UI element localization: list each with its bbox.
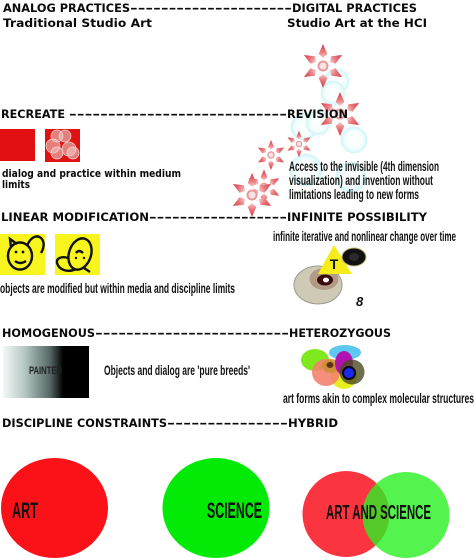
heading: homogenous to heterozygous: HOMOGENOUS xyxy=(2,326,95,340)
venn diagram: art and science xyxy=(302,471,450,558)
bubbles xyxy=(290,69,367,192)
icon: eye and triangle: 8 xyxy=(356,294,364,309)
panel: digital bubbles and stars xyxy=(231,44,367,217)
heading: discipline constraints to hybrid xyxy=(2,416,338,430)
heading: linear modification to infinite possibility: ------------------ xyxy=(149,210,287,224)
circle: art: ART xyxy=(12,498,38,523)
heading: linear modification to infinite possibility xyxy=(1,210,427,224)
heading: recreate to revision xyxy=(1,107,348,121)
heading: discipline constraints to hybrid: --------------- xyxy=(167,416,288,430)
icon: eye and triangle: T xyxy=(330,256,339,272)
heading: homogenous to heterozygous xyxy=(2,326,391,340)
icon: molecular structure xyxy=(301,345,364,389)
text: objects are modified: objects are modified but within media and discipline limits xyxy=(0,281,235,296)
text: dialog and practice: limits xyxy=(2,180,30,191)
text: dialog and practice: dialog and practice within medium xyxy=(2,169,181,180)
heading: analog and digital practices: --------------------- xyxy=(130,1,292,15)
heading: recreate to revision: RECREATE xyxy=(1,107,65,121)
circle: science xyxy=(162,458,270,558)
heading: homogenous to heterozygous: HETEROZYGOUS xyxy=(289,326,391,340)
circle: art xyxy=(1,458,108,558)
icon: red square xyxy=(0,129,35,161)
heading: recreate to revision: REVISION xyxy=(287,107,348,121)
heading: analog and digital practices: DIGITAL PRACTICES xyxy=(292,1,417,15)
gradient panel: painted: PAINTED xyxy=(29,365,62,377)
heading: discipline constraints to hybrid: DISCIPLINE CONSTRAINTS xyxy=(2,416,167,430)
heading: recreate to revision: ---------------------------- xyxy=(69,107,287,121)
icon: red square with bubbles xyxy=(45,129,80,162)
heading: analog and digital practices: ANALOG PRACTICES xyxy=(3,1,130,15)
text: dialog and practice xyxy=(2,169,181,191)
icon: yellow face two xyxy=(55,234,100,275)
icon: stars xyxy=(231,44,361,217)
text: pure breeds: Objects and dialog are 'pure breeds' xyxy=(104,363,250,378)
subheading: studio art at the HCI: Studio Art at the HCI xyxy=(287,16,427,30)
circle: science: SCIENCE xyxy=(207,498,262,523)
icon: eye and triangle xyxy=(294,245,366,309)
subheading: traditional studio art: Traditional Studio Art xyxy=(3,16,152,30)
heading: analog and digital practices xyxy=(3,1,417,15)
heading: linear modification to infinite possibility: INFINITE POSSIBILITY xyxy=(287,210,427,224)
heading: discipline constraints to hybrid: HYBRID xyxy=(288,416,338,430)
gradient panel: painted xyxy=(3,346,89,398)
icon: yellow face one xyxy=(0,234,45,275)
heading: linear modification to infinite possibility: LINEAR MODIFICATION xyxy=(1,210,149,224)
heading: homogenous to heterozygous: ------------------------- xyxy=(95,326,289,340)
text: access to the invisible xyxy=(289,159,439,202)
